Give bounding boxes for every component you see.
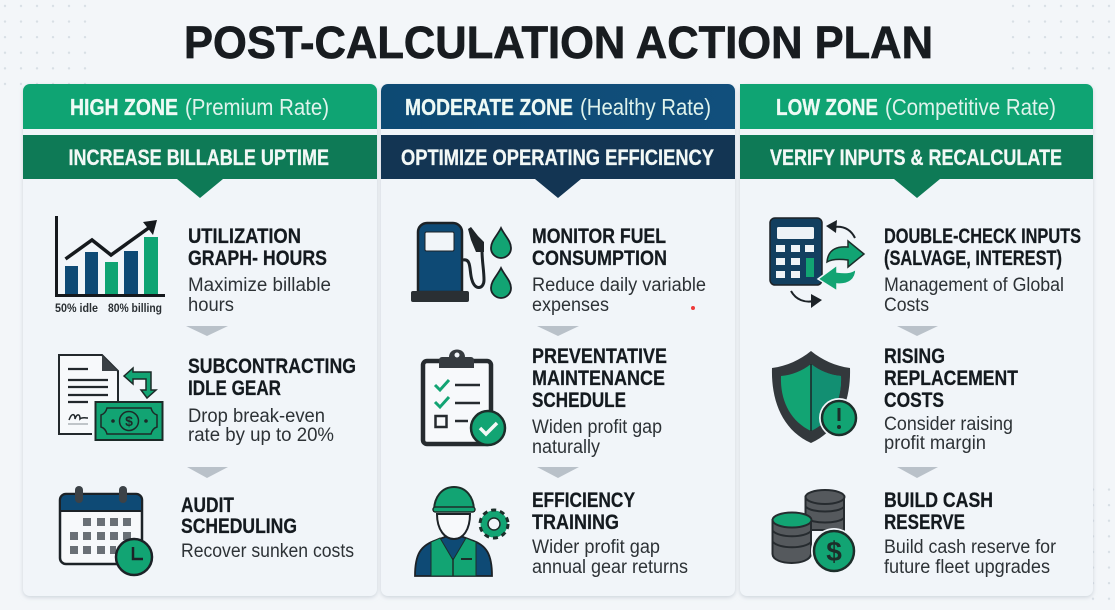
arrow: step down	[897, 467, 938, 478]
arrow: step down	[187, 467, 228, 478]
text: double-check inputs: Management of Global	[884, 275, 1064, 296]
title: POST-CALCULATION ACTION PLAN	[184, 17, 933, 68]
text: build cash reserve: BUILD CASH	[884, 489, 993, 512]
arrow: step down	[537, 326, 579, 336]
text: rising replacement costs: RISING	[884, 345, 945, 368]
icon: calendar and clock	[60, 486, 152, 575]
text: rising replacement costs	[884, 345, 1018, 454]
icon: shield warning	[772, 351, 859, 443]
arrow: step down	[537, 467, 579, 478]
text: efficiency training: TRAINING	[532, 511, 619, 534]
text: subcontracting idle gear: rate by up to 20%	[188, 425, 334, 446]
text: rising replacement costs: Consider raising	[884, 414, 1013, 435]
text: monitor fuel consumption: MONITOR FUEL	[532, 225, 666, 248]
text: monitor fuel consumption: CONSUMPTION	[532, 247, 667, 270]
arrow: step down	[897, 326, 938, 336]
text: build cash reserve	[884, 489, 1057, 578]
text: preventative maintenance schedule: naturally	[532, 437, 600, 458]
text: subcontracting idle gear: IDLE GEAR	[188, 377, 281, 400]
panel: low zone	[740, 84, 1093, 596]
text: double-check inputs: Costs	[884, 295, 929, 316]
icon: checklist clipboard	[423, 350, 505, 445]
zone header: low zone	[740, 84, 1093, 129]
zone header: moderate zone: MODERATE ZONE	[405, 94, 573, 120]
icon: contract and money: $	[125, 413, 133, 429]
text: preventative maintenance schedule: PREVENTATIVE	[532, 345, 667, 368]
text: subcontracting idle gear	[188, 355, 356, 446]
strategy banner: optimize operating efficiency	[381, 135, 735, 198]
icon: utilization bar chart	[55, 216, 165, 315]
text: audit scheduling: SCHEDULING	[181, 515, 297, 538]
zone header: moderate zone	[381, 84, 735, 129]
zone header: low zone: (Competitive Rate)	[885, 94, 1056, 120]
text: preventative maintenance schedule: Widen profit gap	[532, 417, 662, 438]
text: utilization graph: GRAPH- HOURS	[188, 247, 327, 270]
text: audit scheduling: AUDIT	[181, 494, 234, 517]
text: monitor fuel consumption: expenses	[532, 295, 609, 316]
text: preventative maintenance schedule: MAINTENANCE	[532, 367, 665, 390]
zone header: high zone: HIGH ZONE	[70, 94, 178, 120]
text: rising replacement costs: profit margin	[884, 433, 986, 454]
text: double-check inputs	[884, 225, 1081, 316]
zone header: high zone	[23, 84, 377, 129]
text: audit scheduling	[181, 494, 354, 562]
icon: fuel pump	[411, 223, 511, 302]
text: efficiency training	[532, 489, 688, 578]
panel: moderate zone	[381, 84, 735, 596]
arrow: step down	[186, 326, 228, 336]
zone header: high zone: (Premium Rate)	[185, 94, 329, 120]
icon: calculator with arrows	[770, 218, 864, 308]
text: build cash reserve: RESERVE	[884, 511, 965, 534]
text: efficiency training: Wider profit gap	[532, 537, 660, 558]
panel: high zone	[23, 84, 377, 596]
text: double-check inputs: (SALVAGE, INTEREST)	[884, 247, 1062, 270]
icon: coin stacks with dollar	[772, 490, 857, 574]
strategy banner: increase billable uptime: INCREASE BILLABLE UPTIME	[68, 145, 329, 170]
icon: utilization bar chart: 50% idle	[55, 301, 98, 315]
zone header: moderate zone: (Healthy Rate)	[580, 94, 711, 120]
text: audit scheduling: Recover sunken costs	[181, 541, 354, 562]
text: build cash reserve: Build cash reserve for	[884, 537, 1057, 558]
icon: coin stacks with dollar: $	[826, 536, 842, 567]
text: subcontracting idle gear: SUBCONTRACTING	[188, 355, 356, 378]
text: efficiency training: EFFICIENCY	[532, 489, 635, 512]
icon: worker with gear	[415, 487, 508, 576]
text: utilization graph: Maximize billable	[188, 275, 331, 296]
text: monitor fuel consumption	[532, 225, 706, 316]
text: utilization graph	[188, 225, 331, 316]
text: monitor fuel consumption: Reduce daily variable	[532, 275, 706, 296]
red dot	[691, 306, 695, 310]
text: preventative maintenance schedule	[532, 345, 667, 458]
icon: utilization bar chart: 80% billing	[108, 301, 162, 315]
text: utilization graph: UTILIZATION	[188, 225, 301, 248]
text: rising replacement costs: COSTS	[884, 389, 944, 412]
text: efficiency training: annual gear returns	[532, 557, 688, 578]
strategy banner: verify inputs and recalculate	[740, 135, 1093, 198]
icon: contract and money	[59, 355, 162, 440]
text: preventative maintenance schedule: SCHEDULE	[532, 389, 626, 412]
text: utilization graph: hours	[188, 295, 234, 316]
text: rising replacement costs: REPLACEMENT	[884, 367, 1018, 390]
text: subcontracting idle gear: Drop break-even	[188, 406, 325, 427]
text: build cash reserve: future fleet upgrades	[884, 557, 1050, 578]
strategy banner: optimize operating efficiency: OPTIMIZE OPERATING EFFICIENCY	[401, 145, 714, 170]
strategy banner: increase billable uptime	[23, 135, 377, 198]
zone header: low zone: LOW ZONE	[776, 94, 878, 120]
